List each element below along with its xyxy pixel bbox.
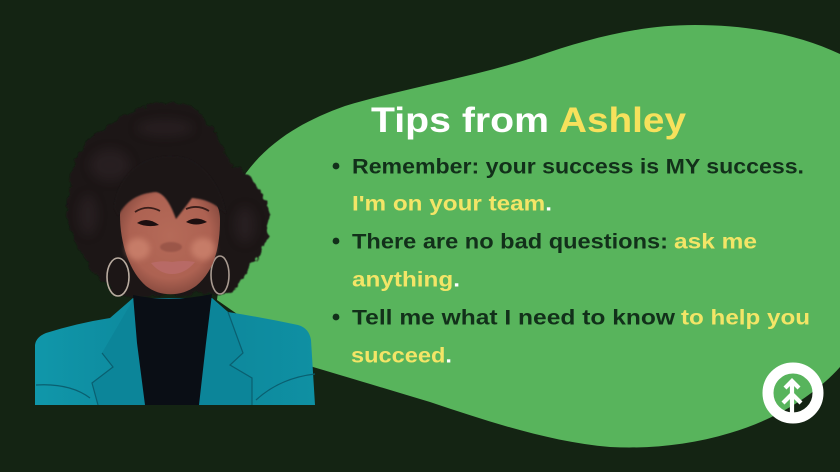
nose — [160, 242, 182, 252]
lips — [151, 261, 195, 274]
blazer — [35, 298, 315, 405]
cheeks — [126, 238, 150, 260]
title: Tips from — [371, 101, 549, 140]
tips list — [333, 154, 810, 368]
green blob panel — [217, 25, 840, 447]
portrait: Ashley — [35, 104, 315, 405]
tip 3: to help you — [681, 306, 810, 330]
hair highlights — [79, 120, 255, 243]
eyes and brows — [135, 207, 209, 226]
icon: tree logo — [768, 368, 818, 418]
tip 2: anything . — [352, 268, 460, 292]
hair back — [67, 104, 270, 297]
face — [120, 188, 220, 294]
tip 2: ask me — [674, 230, 757, 254]
tip 1: I'm on your team . — [352, 192, 552, 216]
tip 3: Tell me what I need to know — [352, 306, 675, 330]
tip 2: There are no bad questions: — [352, 230, 668, 254]
earring left — [107, 258, 129, 296]
tip 3: succeed . — [351, 344, 452, 368]
earring right — [211, 256, 229, 294]
fringe — [114, 156, 226, 219]
turtleneck — [133, 294, 212, 405]
lapels — [36, 300, 315, 405]
tip 1: Remember: your success is MY success. — [352, 154, 804, 178]
tip 3 — [333, 306, 810, 368]
title — [371, 101, 687, 140]
tip 1 — [333, 154, 804, 216]
tip 2 — [333, 230, 757, 292]
title: Ashley — [559, 101, 687, 140]
